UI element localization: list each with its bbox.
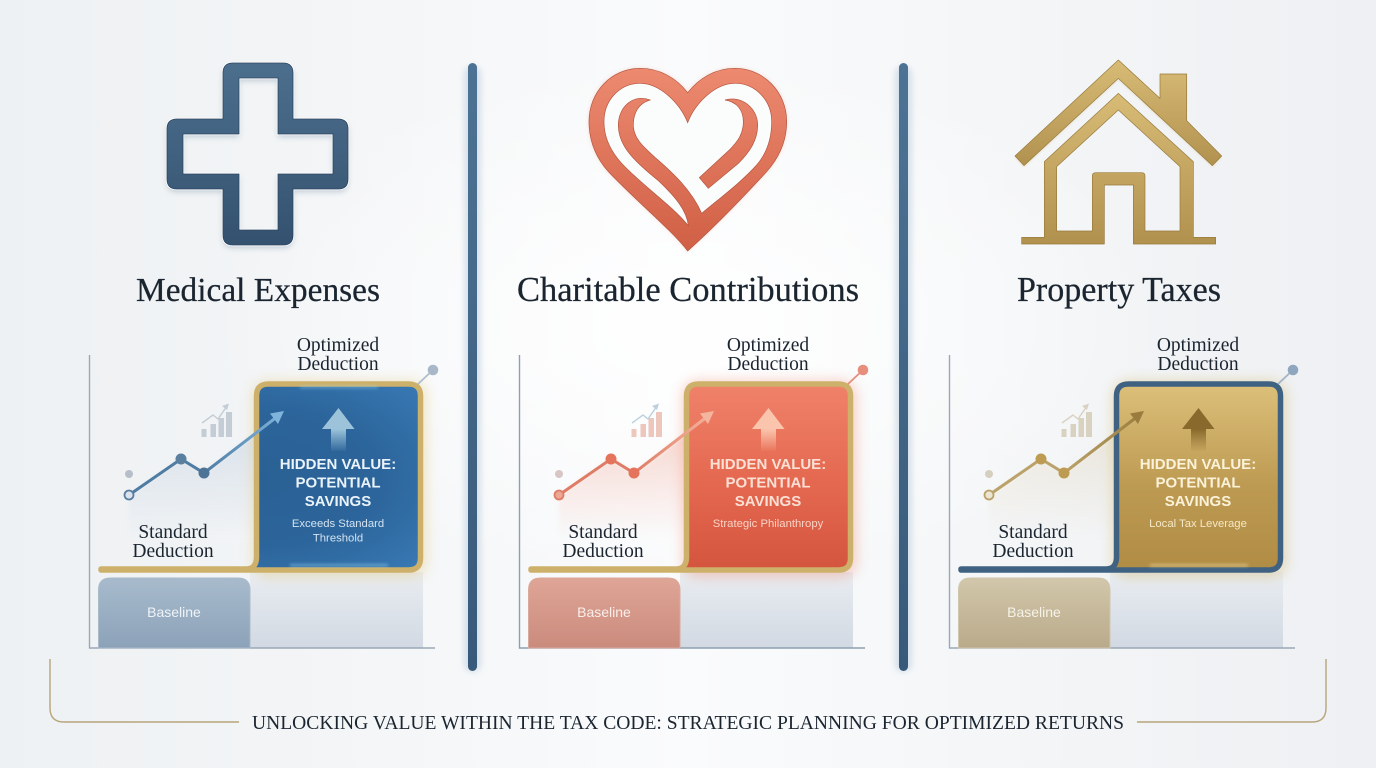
top marker: [418, 365, 438, 384]
top marker: [848, 365, 868, 384]
footer bracket right: [1137, 659, 1326, 722]
icon: mini growth chart: [632, 404, 662, 437]
callout: hidden value: HIDDEN VALUE:: [710, 456, 826, 473]
label: optimized deduction: Optimized: [297, 335, 379, 356]
highlighted box: [531, 384, 850, 570]
chart: charitable deduction: [520, 335, 868, 648]
callout: hidden value: SAVINGS: [735, 493, 801, 510]
baseline bar: Baseline: [577, 604, 631, 620]
icon: up arrow: [322, 408, 354, 451]
callout: hidden value: POTENTIAL: [1156, 474, 1240, 492]
callout note: Local Tax Leverage: [1149, 518, 1247, 530]
label: optimized deduction: Deduction: [297, 354, 379, 375]
highlighted box: [101, 384, 420, 570]
callout: hidden value: HIDDEN VALUE:: [280, 456, 396, 473]
callout: hidden value: SAVINGS: [1165, 493, 1231, 510]
baseline bar: Baseline: [1007, 604, 1061, 620]
trend line: [124, 411, 284, 500]
label: standard deduction: Deduction: [562, 541, 644, 562]
icon: medical cross: [167, 63, 348, 248]
icon: heart: [589, 68, 787, 251]
icon: mini growth chart: [1062, 404, 1092, 437]
divider left: [464, 63, 481, 672]
icon: house: [1015, 60, 1222, 244]
callout note: Exceeds Standard: [292, 518, 384, 530]
icon: mini growth chart: [202, 404, 232, 437]
box shadow: [1112, 380, 1287, 578]
axes: [950, 355, 1295, 648]
label: standard deduction: Standard: [138, 522, 208, 543]
callout: hidden value: POTENTIAL: [296, 474, 380, 492]
label: optimized deduction: Optimized: [1157, 335, 1239, 356]
trend line: [984, 411, 1144, 500]
callout note: Strategic Philanthropy: [713, 518, 824, 530]
axes: [90, 355, 435, 648]
panel: property taxes: [950, 60, 1298, 648]
grey base area: [250, 572, 423, 648]
label: standard deduction: Deduction: [132, 541, 214, 562]
label: optimized deduction: Deduction: [1157, 354, 1239, 375]
label: standard deduction: Deduction: [992, 541, 1074, 562]
chart: medical deduction: [90, 335, 438, 648]
grey base area: [1110, 572, 1283, 648]
top marker: [1278, 365, 1298, 384]
divider right: [895, 63, 912, 672]
icon: up arrow: [1182, 408, 1214, 451]
baseline bar: [98, 578, 250, 648]
chart: property deduction: [950, 335, 1298, 648]
grey base area: [680, 572, 853, 648]
box shadow: [682, 380, 857, 578]
trend fill: [559, 431, 689, 566]
label: standard deduction: Standard: [568, 522, 638, 543]
trend line: [554, 411, 714, 500]
callout note: Threshold: [313, 532, 363, 544]
heading: charitable contributions: Charitable Contributions: [517, 271, 859, 309]
callout: hidden value: HIDDEN VALUE:: [1140, 456, 1256, 473]
trend fill: [129, 431, 259, 566]
panel: medical expenses: [90, 63, 438, 648]
footer bracket left: [50, 659, 239, 722]
icon: up arrow: [752, 408, 784, 451]
callout: hidden value: SAVINGS: [305, 493, 371, 510]
callout: hidden value: POTENTIAL: [726, 474, 810, 492]
baseline bar: [958, 578, 1110, 648]
box shadow: [252, 380, 427, 578]
label: standard deduction: Standard: [998, 522, 1068, 543]
highlighted box: [961, 384, 1280, 570]
baseline bar: [528, 578, 680, 648]
trend fill: [989, 431, 1119, 566]
label: optimized deduction: Optimized: [727, 335, 809, 356]
heading: medical expenses: Medical Expenses: [136, 272, 380, 309]
panel: charitable contributions: [517, 68, 868, 648]
heading: property taxes: Property Taxes: [1017, 271, 1221, 309]
label: optimized deduction: Deduction: [727, 354, 809, 375]
axes: [520, 355, 865, 648]
footer tagline: UNLOCKING VALUE WITHIN THE TAX CODE: STRATEGIC PLANNING FOR OPTIMIZED RETURNS: [252, 712, 1124, 734]
baseline bar: Baseline: [147, 604, 201, 620]
